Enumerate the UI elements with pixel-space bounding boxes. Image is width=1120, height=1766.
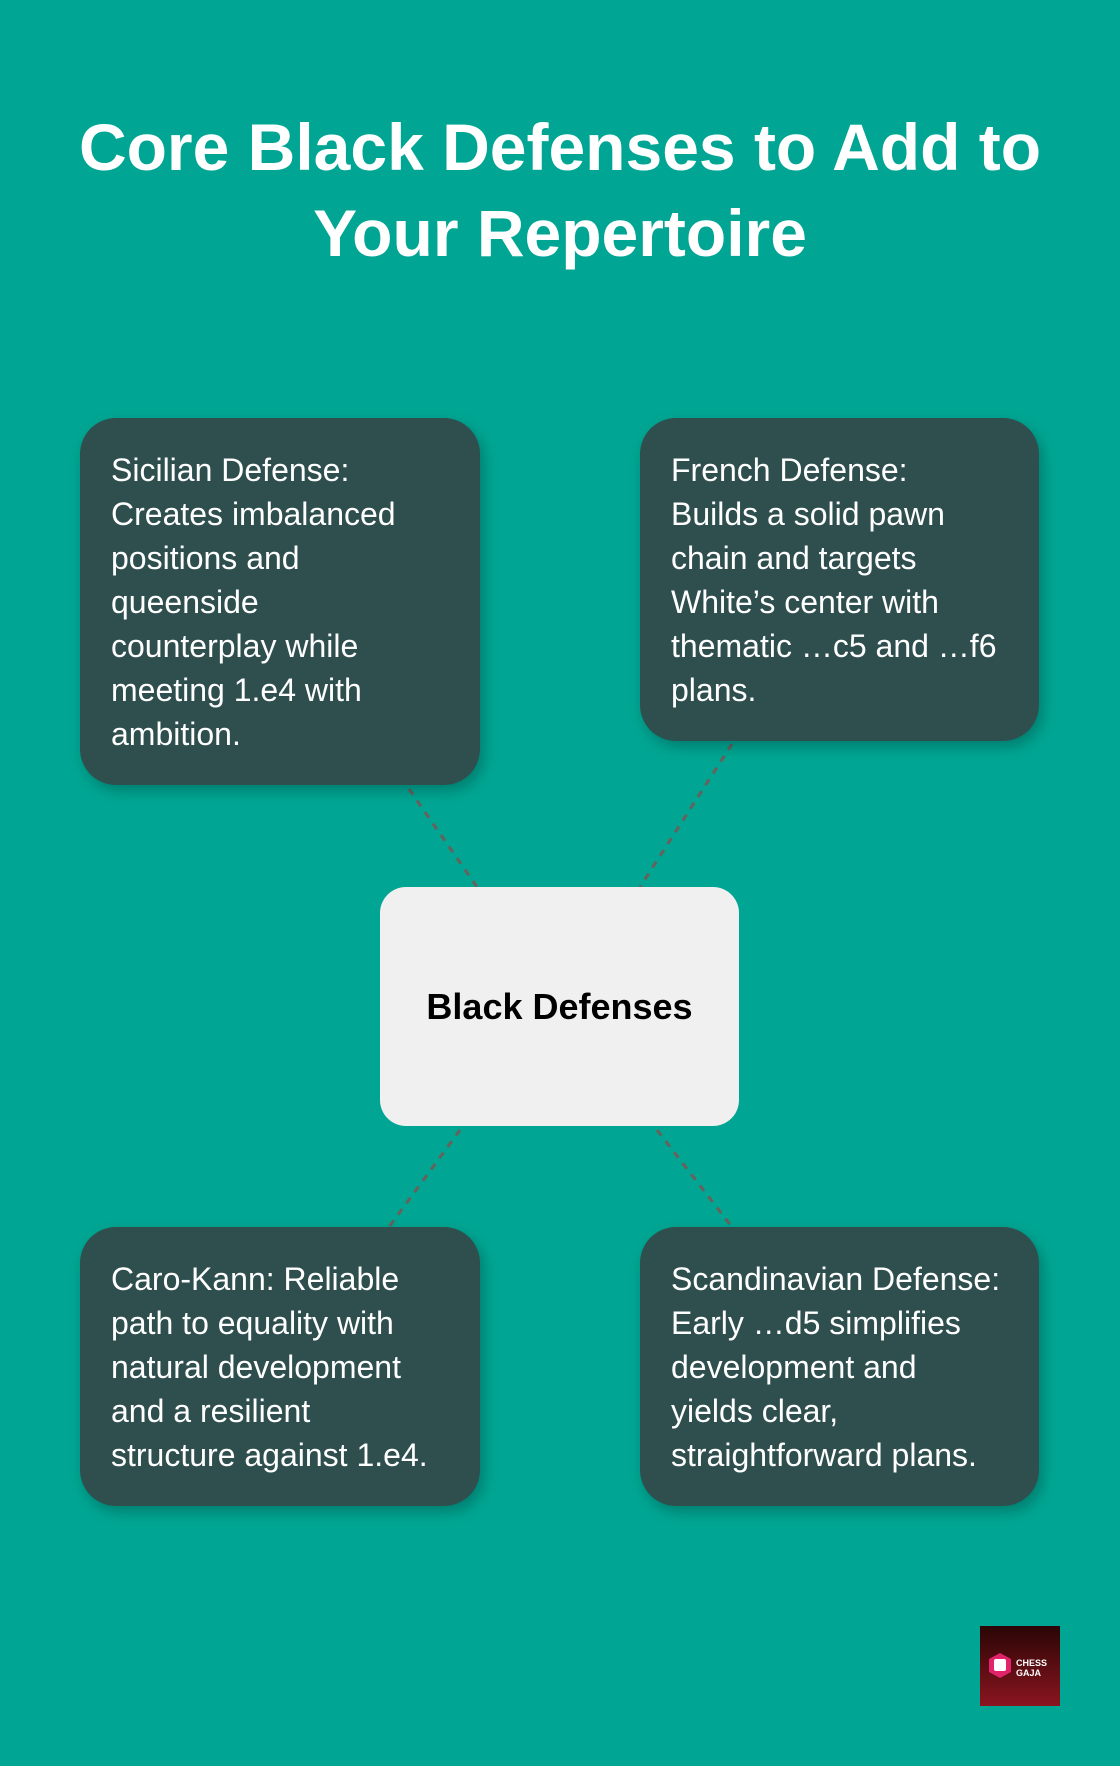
panel: Caro-Kann: structure against 1.e4. xyxy=(111,1437,428,1473)
panel: Sicilian Defense: counterplay while xyxy=(111,628,358,664)
center node xyxy=(380,887,739,1126)
panel: Caro-Kann: and a resilient xyxy=(111,1393,310,1429)
panel: Scandinavian Defense xyxy=(640,1227,1039,1506)
panel: French Defense: Builds a solid pawn xyxy=(671,496,945,532)
panel: Caro-Kann: Caro-Kann: Reliable xyxy=(111,1261,399,1297)
panel: French Defense: White’s center with xyxy=(671,584,939,620)
panel: Sicilian Defense: queenside xyxy=(111,584,259,620)
title: Your Repertoire xyxy=(313,196,807,270)
panel: Caro-Kann xyxy=(80,1227,480,1506)
panel: French Defense: French Defense: xyxy=(671,452,908,488)
panel: French Defense xyxy=(640,418,1039,741)
panel: Caro-Kann: path to equality with xyxy=(111,1305,394,1341)
panel: Caro-Kann: natural development xyxy=(111,1349,401,1385)
panel: Sicilian Defense: Sicilian Defense: xyxy=(111,452,349,488)
panel: Sicilian Defense: Creates imbalanced xyxy=(111,496,396,532)
logo: Chess Gaja xyxy=(980,1626,1060,1706)
panel: Sicilian Defense: ambition. xyxy=(111,716,241,752)
panel: French Defense: plans. xyxy=(671,672,756,708)
panel: Sicilian Defense: meeting 1.e4 with xyxy=(111,672,362,708)
center node: Black Defenses xyxy=(426,986,693,1026)
panel: Scandinavian Defense: Scandinavian Defense: xyxy=(671,1261,1000,1297)
panel: Scandinavian Defense: development and xyxy=(671,1349,917,1385)
title xyxy=(79,110,1041,270)
panel: French Defense: thematic …c5 and …f6 xyxy=(671,628,996,664)
logo: Chess Gaja: CHESS xyxy=(1016,1658,1047,1668)
panel: Sicilian Defense xyxy=(80,418,480,785)
panel: Sicilian Defense: positions and xyxy=(111,540,300,576)
logo: Chess Gaja: GAJA xyxy=(1016,1668,1042,1678)
panel: French Defense: chain and targets xyxy=(671,540,916,576)
panel: Scandinavian Defense: yields clear, xyxy=(671,1393,838,1429)
title: Core Black Defenses to Add to xyxy=(79,110,1041,184)
panel: Scandinavian Defense: Early …d5 simplifies xyxy=(671,1305,961,1341)
panel: Scandinavian Defense: straightforward plans. xyxy=(671,1437,977,1473)
